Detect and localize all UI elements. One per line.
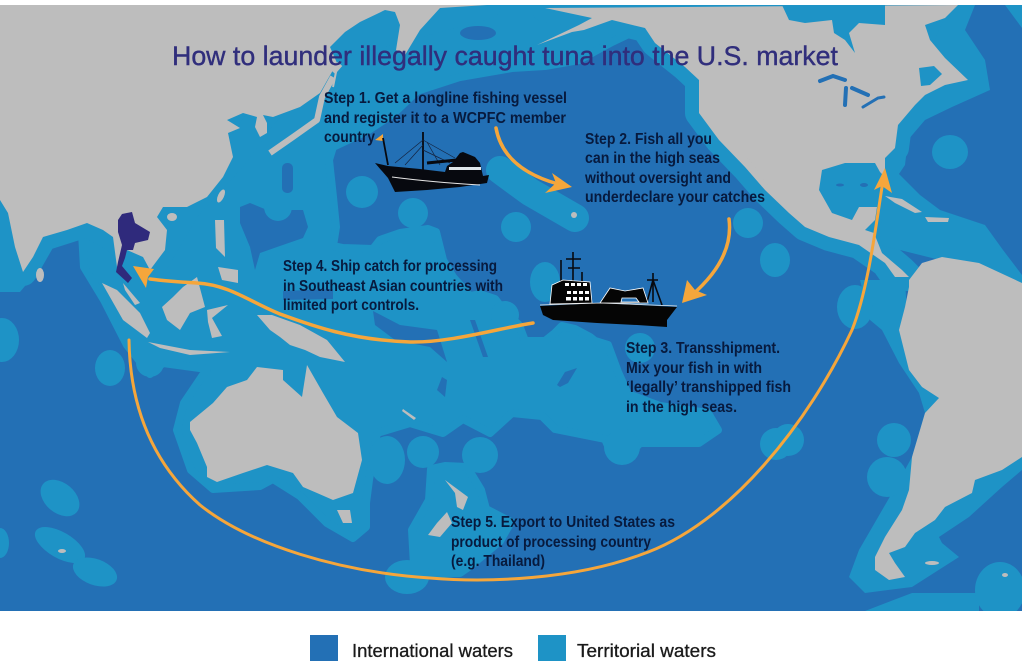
text: step 4: limited port controls.: [283, 297, 419, 314]
arrow: Southeast Asia to United States: [129, 168, 892, 580]
text: step 3: in the high seas.: [626, 399, 737, 416]
text: step 3: [626, 340, 791, 416]
international water patches: [2, 26, 868, 397]
text: step 2: Step 2. Fish all you: [585, 131, 712, 148]
west of India: [0, 239, 25, 292]
arrow: step 1 to step 2: [496, 128, 572, 193]
legend: [310, 635, 716, 661]
text: step 1: Step 1. Get a longline fishing vessel: [324, 90, 567, 107]
legend label: territorial waters: Territorial waters: [577, 641, 716, 661]
text: step 3: ‘legally’ transhipped fish: [626, 379, 791, 396]
text: step 3: Step 3. Transshipment.: [626, 340, 780, 357]
icon: Thailand highlighted: [116, 212, 150, 283]
legend swatch: international waters: [310, 635, 338, 661]
text: step 2: underdeclare your catches: [585, 189, 765, 206]
text: step 4: [283, 258, 503, 314]
text: step 2: without oversight and: [584, 170, 731, 187]
great lakes: [820, 76, 884, 107]
text: step 1: and register it to a WCPFC member: [324, 110, 566, 127]
text: step 5: Step 5. Export to United States as: [451, 514, 675, 531]
icon: transshipment vessel: [540, 252, 677, 327]
text: step 2: can in the high seas: [585, 150, 720, 167]
gulf of Mexico: [834, 177, 884, 203]
text: step 5: [451, 514, 675, 570]
text: step 4: in Southeast Asian countries with: [283, 278, 503, 295]
title: How to launder illegally caught tuna into the U.S. market: [172, 41, 838, 71]
icon: longline fishing vessel: [375, 132, 489, 192]
arrow: step 2 to step 3: [682, 219, 730, 303]
text: step 5: (e.g. Thailand): [451, 553, 545, 570]
text: step 3: Mix your fish in with: [626, 360, 762, 377]
text: step 2: [584, 131, 765, 206]
text: step 1: [324, 90, 567, 146]
territorial water cut into patch: [264, 209, 292, 221]
legend swatch: territorial waters: [538, 635, 566, 661]
legend label: international waters: International waters: [352, 641, 513, 661]
hudson bay and arctic straits: [782, 5, 942, 86]
text: step 4: Step 4. Ship catch for processing: [283, 258, 497, 275]
text: step 1: country: [324, 129, 375, 146]
arrow: step 3 to Thailand: [133, 266, 533, 342]
text: step 5: product of processing country: [451, 534, 651, 551]
